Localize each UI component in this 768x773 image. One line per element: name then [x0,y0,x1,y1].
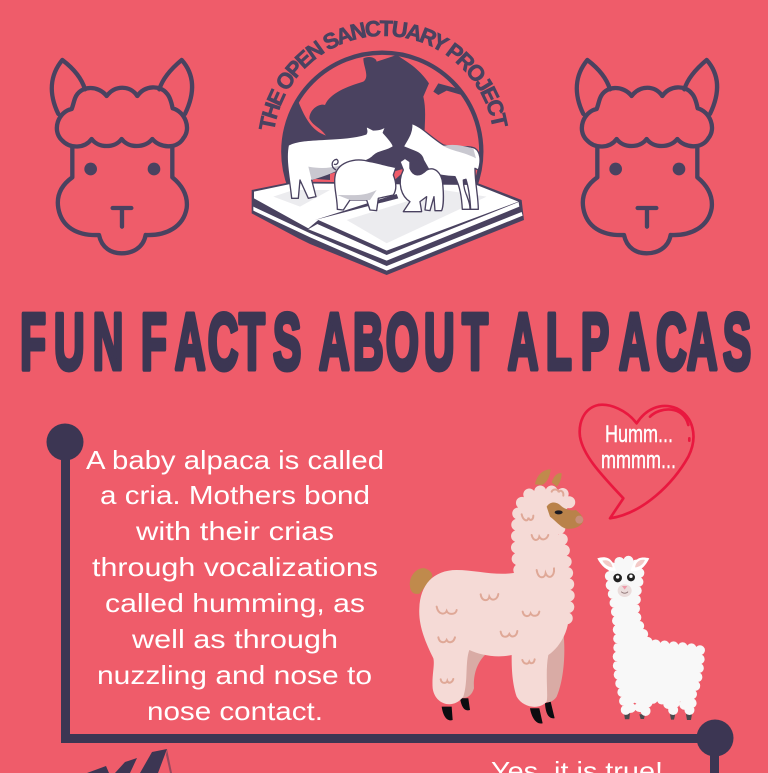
speech bubble: heart: mmmm... [601,447,676,474]
text block: baby alpaca fact: A baby alpaca is called [86,445,384,475]
text block: baby alpaca fact: nuzzling and nose to [97,660,372,690]
icon: alpaca head left [52,60,192,253]
logo cow [287,126,393,198]
speech bubble: heart [580,405,693,518]
logo rooster [400,158,443,212]
logo arched name: THE OPEN SANCTUARY PROJECT [258,20,508,130]
icon: alpaca head right [577,60,717,253]
text block: baby alpaca fact: called humming, as [105,588,365,618]
logo pig [332,159,396,211]
illustration: baby alpaca [597,557,700,720]
text block: baby alpaca fact: through vocalizations [92,552,378,582]
logo horse [403,123,480,209]
logo globe [281,50,484,184]
title: FUN FACTS ABOUT ALPACAS [20,297,751,386]
timeline connector [46,424,734,773]
icon: striped shape at page bottom [87,749,172,773]
text block: baby alpaca fact [86,445,384,726]
text block: baby alpaca fact: nose contact. [147,696,323,726]
text block: baby alpaca fact: a cria. Mothers bond [100,480,370,510]
text block: baby alpaca fact: well as through [131,624,338,654]
logo book [252,182,524,275]
text block: baby alpaca fact: with their crias [135,516,334,546]
logo: The Open Sanctuary Project [252,20,524,275]
speech bubble: heart: Humm... [605,421,673,448]
illustration: adult alpaca [410,469,583,724]
